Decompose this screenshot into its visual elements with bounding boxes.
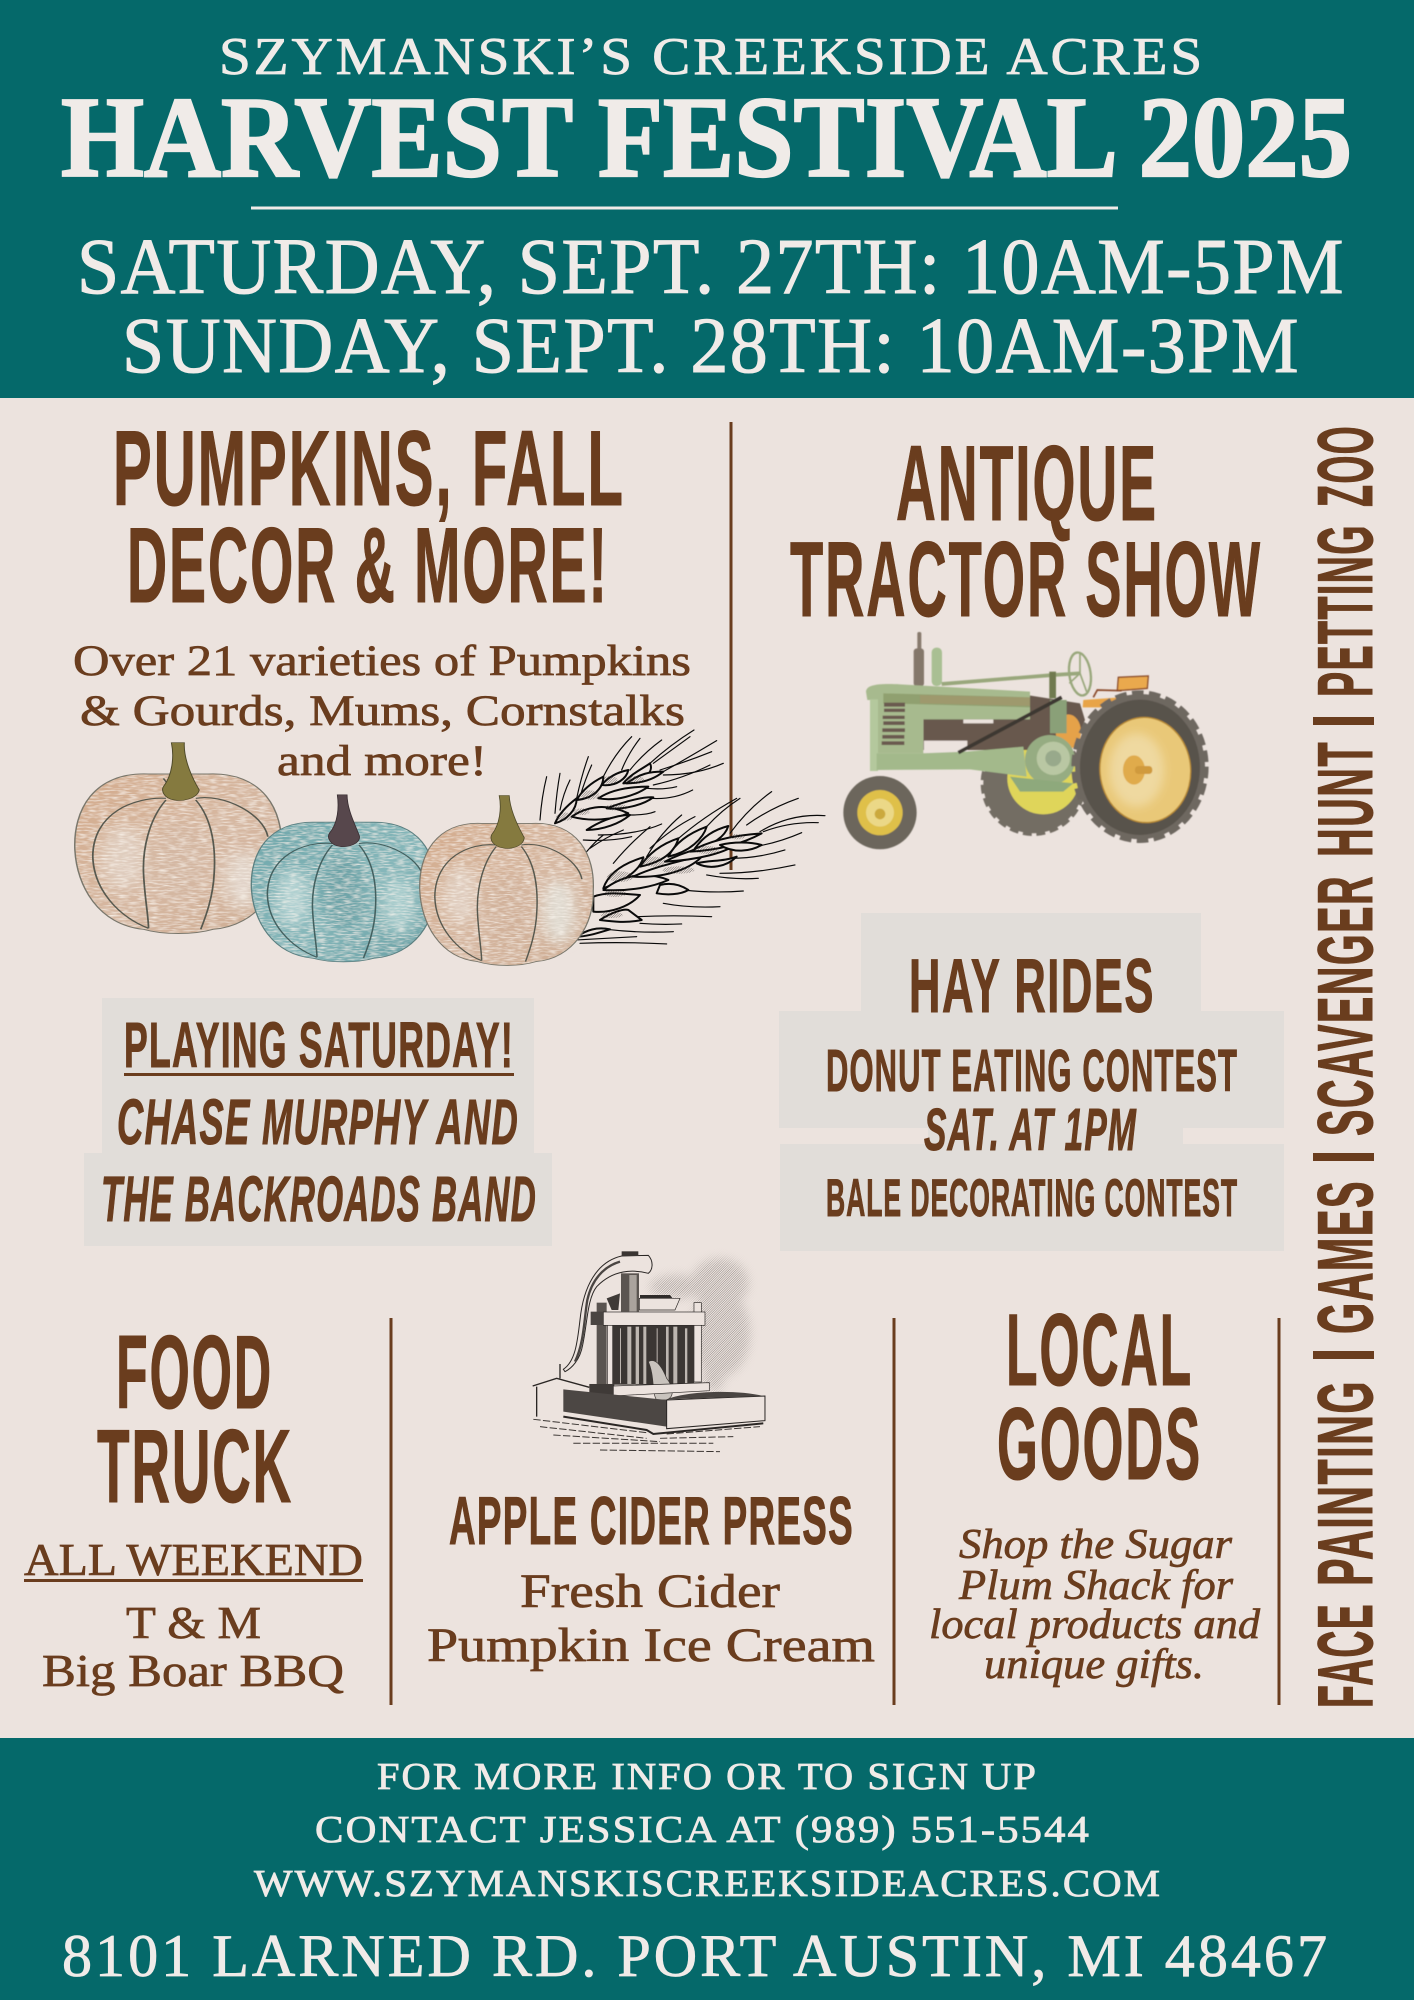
heading: antique tractor show: ANTIQUE [896,423,1158,543]
text: fresh cider: Fresh Cider [520,1565,780,1618]
icon: wheat [540,730,825,944]
vertical activities list [1301,425,1389,1708]
icon: blue pumpkin [251,795,435,962]
heading: pumpkins: PUMPKINS, FALL [113,408,625,528]
wheat ear upper: hatching [556,776,644,821]
text: sugar plum shack: unique gifts. [984,1642,1204,1688]
text: sugar plum shack: Shop the Sugar [959,1522,1233,1568]
heading: apple cider press: APPLE CIDER PRESS [449,1483,854,1559]
panel backgrounds [779,913,1284,1251]
panel: apple cider press text [427,1483,875,1672]
panel: food truck [24,1315,363,1696]
vertical activities list: PETTING [1301,524,1389,697]
heading: hay rides: HAY RIDES [909,944,1155,1029]
tray [563,1389,667,1427]
vertical activities list: SCAVENGER [1301,875,1389,1136]
base plate [589,1384,614,1396]
panel: live music [84,998,552,1246]
text: vendors: T & M [126,1597,261,1648]
text: sugar plum shack [929,1522,1261,1688]
icon: cider press [533,1243,767,1452]
hatch shadow [644,1252,756,1392]
hood [866,684,1030,753]
icon: pumpkins [75,743,593,965]
text: playing saturday: PLAYING SATURDAY! [124,1009,514,1081]
text: band name: CHASE MURPHY AND [117,1086,519,1158]
press staves [613,1325,694,1385]
panel backgrounds [84,998,552,1246]
text: playing saturday [124,1009,514,1081]
contact information: WWW.SZYMANSKISCREEKSIDEACRES.COM [254,1863,1162,1905]
text: all weekend: ALL WEEKEND [24,1534,363,1585]
steering [942,651,1094,698]
text: ZOO [1301,425,1389,507]
text: pumpkin ice cream: Pumpkin Ice Cream [427,1619,875,1672]
contact information [254,1756,1162,1905]
frame [877,747,1027,777]
pulley [1010,735,1075,792]
heading: antique tractor show [790,423,1262,639]
text: pumpkin description: Over 21 varieties of Pumpkins [73,638,691,685]
wheat ear upper: kernels [555,763,663,830]
contact information: FOR MORE INFO OR TO SIGN UP [377,1756,1038,1798]
panel: hay rides and contests [779,913,1284,1251]
footer banner [0,1738,1414,2000]
heading: food truck: TRUCK [97,1409,293,1525]
ground lines [533,1419,760,1452]
icon: peach pumpkin left [75,743,282,934]
text: pumpkin description [73,638,691,785]
text: contest time: SAT. AT 1PM [924,1097,1137,1163]
pomace [648,1361,672,1400]
panel: pumpkins [73,408,691,785]
lever and chain [533,1364,589,1417]
text: pumpkin description: & Gourds, Mums, Cornstalks [80,688,685,735]
heading: local goods [997,1293,1202,1501]
frame [597,1303,607,1386]
saturday hours: SATURDAY, SEPT. 27TH: 10AM-5PM [77,224,1345,311]
text: band name: THE BACKROADS BAND [101,1163,537,1235]
header banner [0,0,1414,398]
text: sugar plum shack: local products and [929,1602,1261,1648]
grille slats [882,703,905,745]
seat [1083,676,1148,707]
far rear wheel [983,733,1083,833]
wheat ear lower: hatching [600,834,745,918]
vertical activities list: HUNT [1301,741,1389,857]
text: pumpkin description: and more! [277,738,487,785]
wheat ear lower: awns [577,792,825,944]
big rear wheel [1075,694,1205,839]
diagonal bar [958,697,1062,753]
text: vendors: Big Boar BBQ [42,1645,344,1696]
heading: food truck: FOOD [116,1315,273,1431]
vertical activities list: GAMES [1301,1180,1389,1334]
venue name: SZYMANSKI’S CREEKSIDE ACRES [219,28,1205,86]
screw [621,1273,639,1312]
heading: pumpkins [113,408,625,625]
exhaust and intake [914,632,942,687]
hopper [639,1298,680,1310]
wheat ear upper: awns [540,730,723,852]
text: sugar plum shack: Plum Shack for [958,1563,1234,1609]
icon: peach pumpkin right [420,795,593,965]
heading: local goods: LOCAL [1006,1293,1193,1407]
dividers: bottom row [391,1318,1279,1705]
wheat ear lower: kernels [577,826,762,937]
engine block [923,695,1085,750]
panel: local goods [929,1293,1261,1688]
vertical activities list: PAINTING [1301,1380,1389,1586]
contact information: CONTACT JESSICA AT (989) 551-5544 [315,1809,1091,1851]
heading: local goods: GOODS [997,1387,1202,1501]
text: vendors [42,1597,344,1696]
orange drive housing [1056,714,1081,749]
icon: tractor [843,632,1205,849]
front wheel [843,776,917,849]
divider: top centre [730,422,732,870]
sunday hours: SUNDAY, SEPT. 28TH: 10AM-3PM [122,303,1300,390]
address: 8101 LARNED RD. PORT AUSTIN, MI 48467 [62,1923,1330,1989]
vertical activities list: FACE [1301,1603,1389,1708]
text: band name [101,1086,537,1235]
heading: food truck [97,1315,293,1525]
gooseneck spout [563,1255,652,1372]
heading: pumpkins: DECOR & MORE! [127,505,609,625]
